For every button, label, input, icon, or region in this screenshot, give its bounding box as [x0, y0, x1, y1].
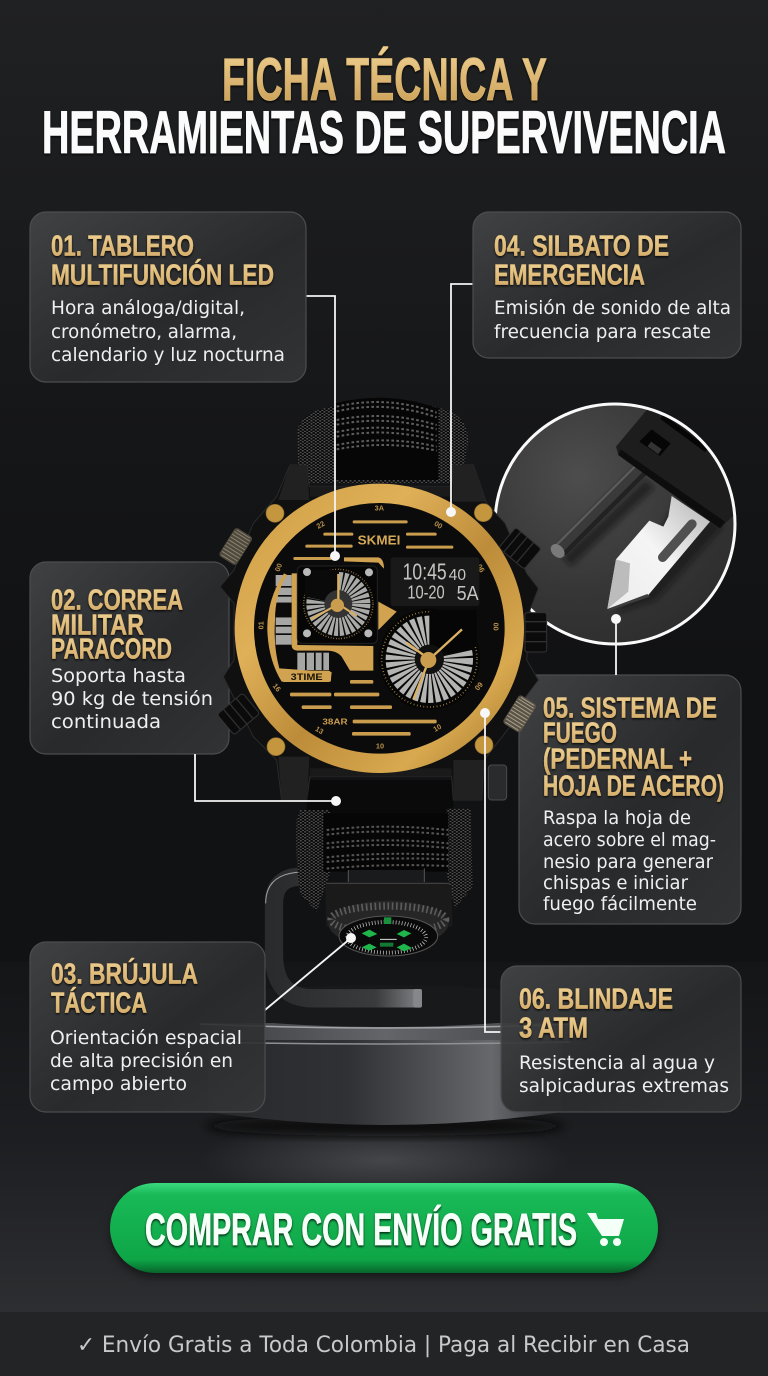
rod end cap: [550, 544, 565, 558]
body 01: calendario y luz nocturna: [51, 344, 285, 366]
body 05: fuego fácilmente: [543, 893, 697, 915]
dial numerals: 22: [315, 519, 326, 531]
LCD screen: 10-20: [407, 582, 445, 603]
body 04: Emisión de sonido de alta: [494, 297, 731, 319]
LCD screen: 40: [449, 567, 466, 584]
heading 06: 06. BLINDAJE: [519, 984, 673, 1016]
LCD screen: 10:45: [403, 558, 447, 584]
body 05: chispas e iniciar: [543, 872, 688, 894]
compass: [325, 882, 452, 956]
blade slot: [663, 524, 692, 557]
LCD screen: 5A: [457, 583, 479, 605]
body 04: frecuencia para rescate: [494, 321, 711, 343]
pusher top right: [499, 527, 541, 569]
top paracord strap: [297, 398, 468, 483]
3TIME label: 3TIME: [291, 672, 323, 682]
footer band: [0, 1312, 768, 1376]
heading 05: (PEDERNAL +: [543, 744, 692, 776]
dial numerals: 00: [433, 519, 444, 531]
dial numerals: 09: [473, 680, 485, 692]
panel: 05: [519, 675, 741, 924]
leader lines: [195, 284, 616, 1032]
leader dots: [330, 507, 621, 943]
dial numerals: 06: [475, 562, 487, 574]
body 06: salpicaduras extremas: [519, 1075, 729, 1097]
heading 04: [494, 230, 669, 292]
dial numerals: 10: [431, 722, 443, 734]
gold dial bars: [290, 520, 453, 736]
gold dial panel: [267, 557, 397, 682]
body 01: cronómetro, alarma,: [51, 321, 237, 343]
body 02: [51, 665, 213, 733]
heading 02: [51, 584, 183, 666]
heading 01: 01. TABLERO: [51, 230, 194, 262]
crown top left: [218, 527, 253, 566]
detail inset: flint and steel blade: [495, 404, 750, 644]
panel: 02: [30, 562, 229, 754]
body 06: Resistencia al agua y: [519, 1052, 715, 1074]
body 03: [50, 1027, 242, 1095]
body 02: 90 kg de tensión: [51, 688, 213, 710]
body 05: nesio para generar: [543, 851, 713, 873]
38AR label: 38AR: [322, 717, 349, 727]
bezel screws: [266, 504, 493, 756]
heading 03: TÁCTICA: [51, 986, 147, 1020]
heading 05: FUEGO: [543, 718, 617, 750]
SKMEI logo: SKMEI: [358, 534, 400, 548]
body 05: acero sobre el mag-: [543, 829, 716, 851]
title: FICHA TÉCNICA Y: [222, 46, 547, 113]
heading 02: PARACORD: [51, 634, 172, 666]
body 05: Raspa la hoja de: [543, 807, 691, 829]
body 01: Hora análoga/digital,: [51, 297, 245, 319]
steel blade: [607, 496, 710, 609]
body 03: de alta precisión en: [50, 1050, 233, 1072]
dial numerals: [256, 504, 500, 750]
dial numerals: 00: [491, 623, 500, 631]
heading 02: 02. CORREA: [51, 584, 183, 616]
heading 04: EMERGENCIA: [494, 260, 645, 292]
body 03: Orientación espacial: [50, 1027, 242, 1049]
large subdial: [379, 609, 480, 710]
panel: 04: [473, 212, 741, 358]
pusher bottom left: [217, 693, 260, 735]
body 04: [494, 297, 731, 343]
heading 05: 05. SISTEMA DE: [543, 692, 717, 724]
ferro rod: [555, 465, 647, 554]
body 03: campo abierto: [50, 1073, 187, 1095]
body 05: [543, 807, 716, 915]
tool handle: [616, 410, 733, 526]
heading 02: MILITAR: [51, 610, 144, 642]
icon: shopping cart: [587, 1213, 624, 1246]
panel: 01: [30, 212, 306, 382]
heading 01: [51, 230, 274, 292]
body 01: [51, 297, 285, 366]
panel: 03: [30, 942, 265, 1112]
pedestal stand: [195, 985, 575, 1136]
body 02: continuada: [51, 711, 161, 733]
dial numerals: 13: [314, 724, 325, 736]
title: [42, 46, 726, 166]
watch side tab: [488, 765, 507, 800]
heading 06: 3 ATM: [519, 1012, 588, 1044]
watch lugs: [278, 465, 486, 800]
left striped panel: [276, 575, 329, 670]
dial numerals: 3A: [375, 504, 385, 513]
body 02: Soporta hasta: [51, 665, 186, 687]
3TIME label: [282, 671, 331, 682]
heading 01: MULTIFUNCIÓN LED: [51, 258, 274, 292]
body 06: [519, 1052, 729, 1097]
dial numerals: 10: [376, 741, 384, 750]
footer band: ✓ Envío Gratis a Toda Colombia | Paga al Recibir en Casa: [77, 1333, 690, 1358]
small subdial: [297, 566, 377, 643]
heading 06: [519, 984, 673, 1044]
heading 03: 03. BRÚJULA: [51, 956, 198, 990]
watch case: [220, 465, 538, 800]
watch: [217, 465, 547, 800]
dial numerals: 16: [271, 682, 283, 694]
rod shadow: [567, 483, 650, 562]
blade edge: [607, 594, 650, 611]
dial numerals: 01: [256, 621, 265, 629]
compass holder ring: [266, 872, 422, 1008]
stripe gaps: [276, 586, 323, 670]
heading 04: 04. SILBATO DE: [494, 230, 669, 262]
pusher right: [525, 613, 547, 652]
heading 03: [51, 956, 198, 1020]
button: buy with free shipping: [110, 1183, 658, 1276]
crown bottom right: [502, 694, 537, 733]
heading 05: [543, 692, 724, 802]
dial numerals: 00: [273, 562, 284, 573]
handle hole: [639, 429, 671, 456]
panel: 06: [501, 966, 741, 1112]
gold bezel: [244, 493, 514, 763]
lower paracord strap: [296, 780, 473, 912]
blade shadow: [617, 500, 723, 613]
blade facet: [607, 559, 630, 609]
rod in the handle hole: [649, 444, 660, 452]
LCD screen: [391, 557, 479, 606]
